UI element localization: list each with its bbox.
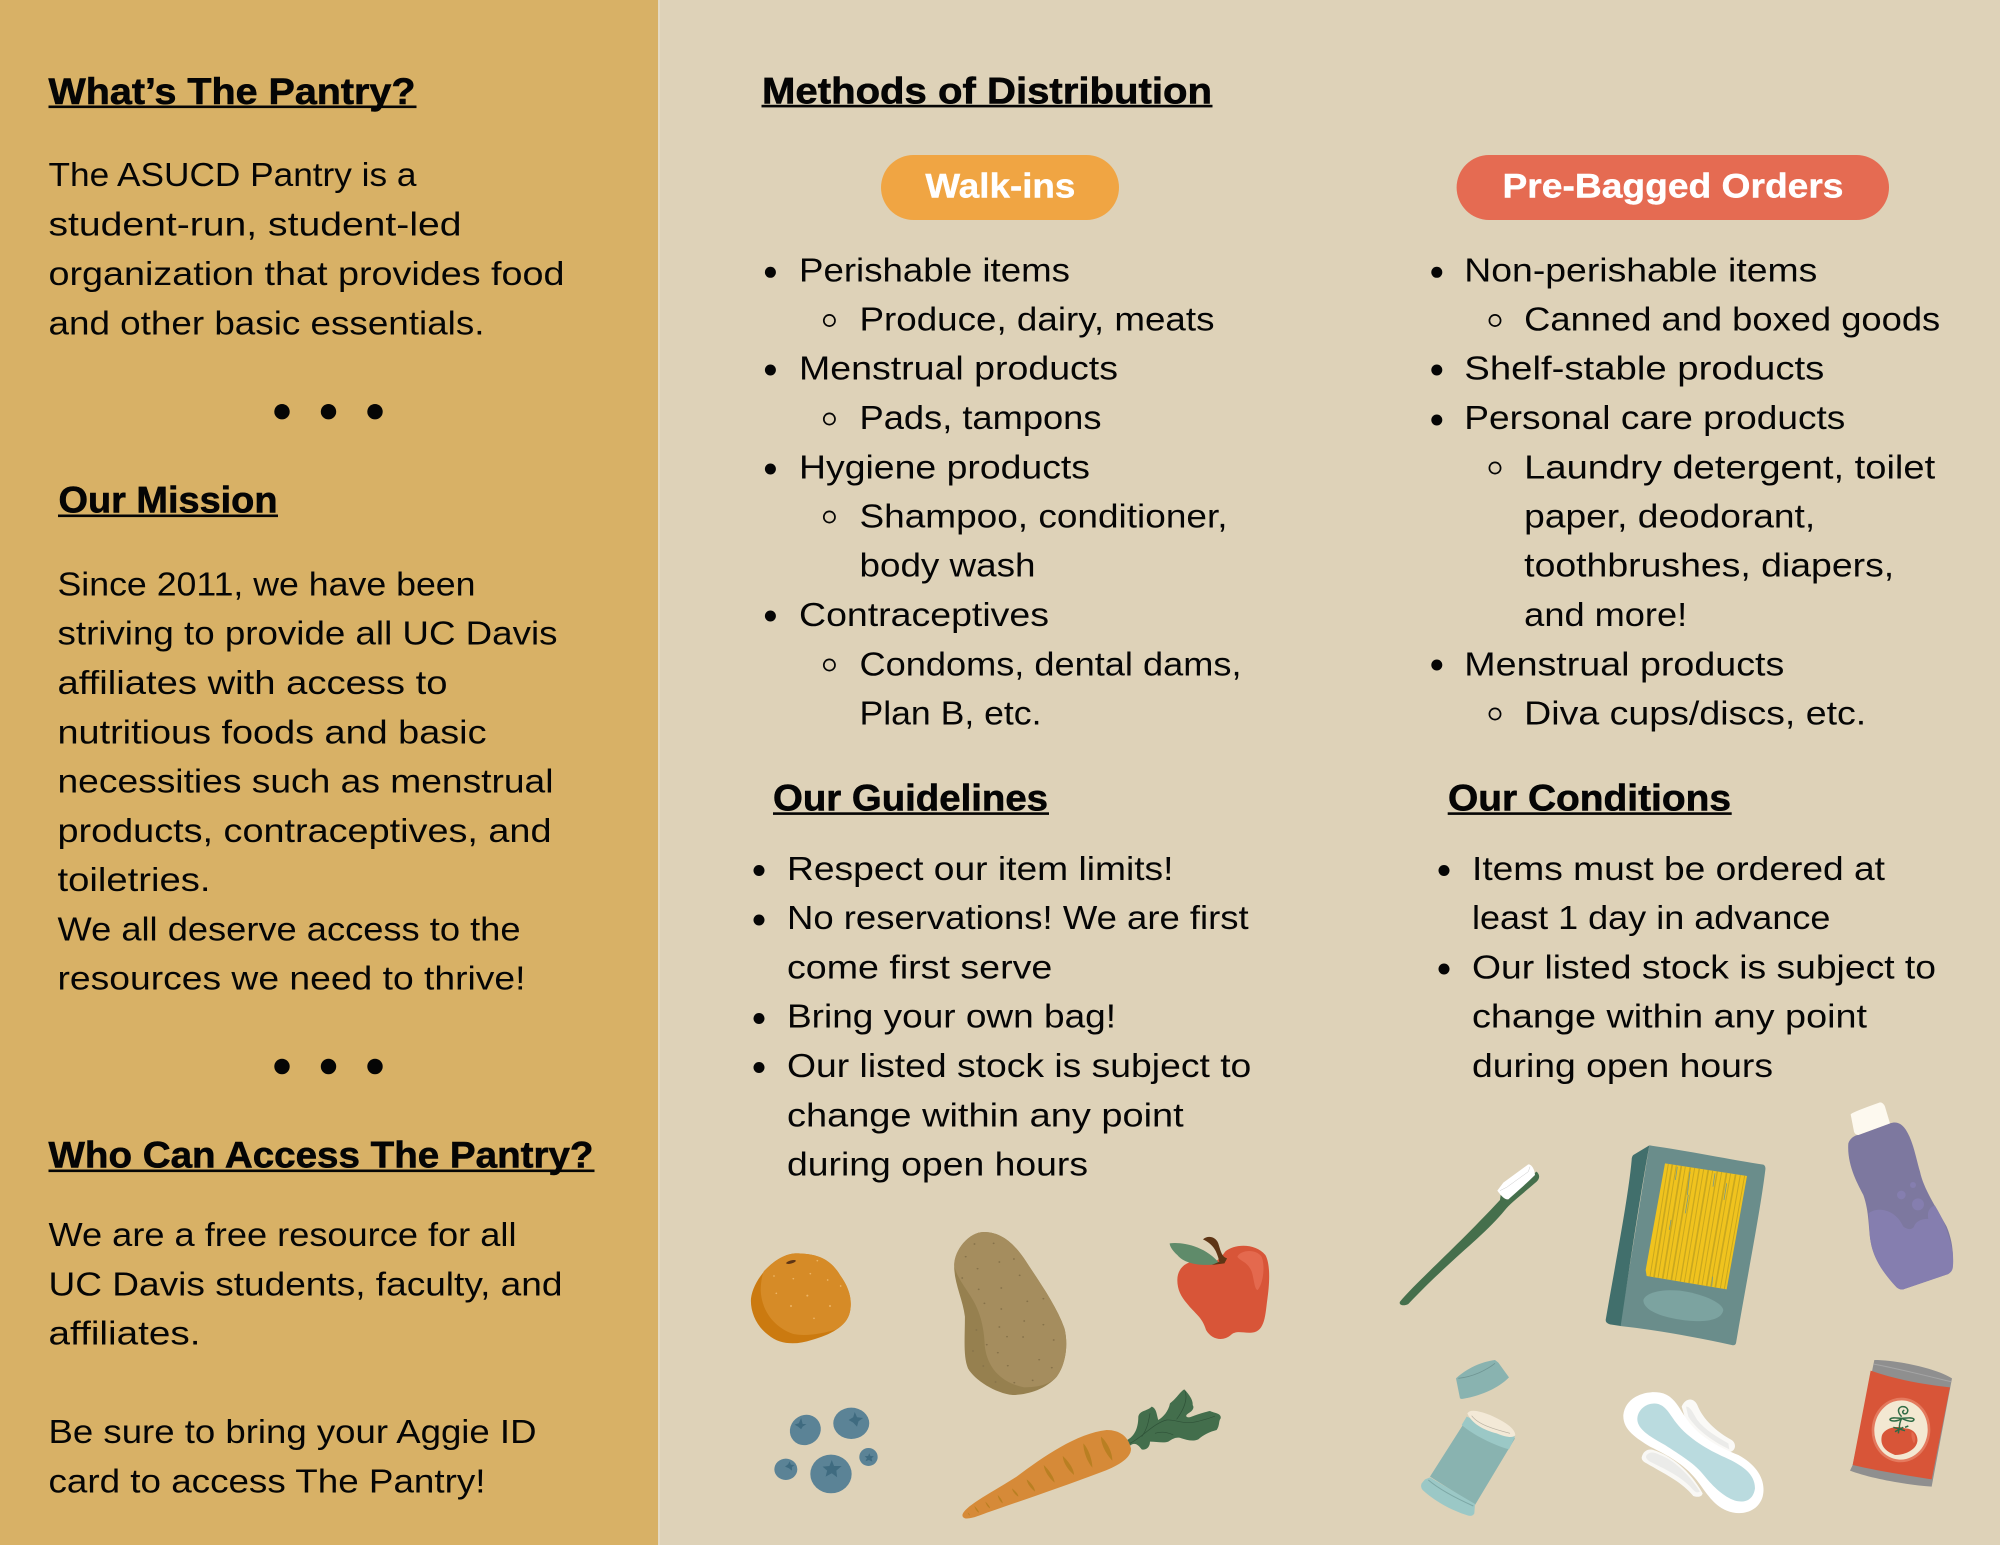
list: pre-bagged items: and more! xyxy=(1524,596,1687,633)
text block: mission: products, contraceptives, and xyxy=(58,812,552,849)
list: guidelines: change within any point xyxy=(787,1096,1184,1133)
text block: mission: toiletries. xyxy=(58,861,210,898)
icon: orange xyxy=(751,1253,851,1343)
list: guidelines xyxy=(754,850,1251,1183)
list: guidelines: come first serve xyxy=(787,948,1052,985)
list: walk-ins items: body wash xyxy=(860,546,1036,584)
list: conditions xyxy=(1438,850,1936,1084)
divider dots: first xyxy=(274,404,383,419)
list: walk-ins items: Shampoo, conditioner, xyxy=(860,498,1228,534)
text block: about the pantry: The ASUCD Pantry is a xyxy=(48,156,417,193)
icon: menstrual pad xyxy=(1623,1392,1764,1513)
text block: who can access: UC Davis students, faculty, and xyxy=(48,1265,562,1302)
text block: who can access: Be sure to bring your Aggie ID xyxy=(48,1413,536,1450)
icon: tomato can xyxy=(1850,1360,1952,1487)
list: pre-bagged items: paper, deodorant, xyxy=(1524,498,1815,534)
list: pre-bagged items: Non-perishable items xyxy=(1464,252,1817,289)
list: pre-bagged items: Canned and boxed goods xyxy=(1524,301,1940,338)
heading: What's The Pantry: What’s The Pantry? xyxy=(48,71,416,112)
text block: about the pantry xyxy=(48,156,564,342)
list: guidelines: Respect our item limits! xyxy=(787,850,1174,887)
list: walk-ins items: Perishable items xyxy=(799,252,1070,289)
text block: mission xyxy=(58,565,558,996)
text block: mission: nutritious foods and basic xyxy=(58,713,487,750)
heading: Our Mission: Our Mission xyxy=(58,480,278,521)
list: conditions: Our listed stock is subject to xyxy=(1472,948,1936,985)
text block: mission: striving to provide all UC Davis xyxy=(58,615,558,652)
list: guidelines: Bring your own bag! xyxy=(787,998,1116,1035)
icon: toothbrush xyxy=(1400,1164,1539,1305)
list: walk-ins items: Condoms, dental dams, xyxy=(860,646,1242,682)
icon: potato xyxy=(954,1232,1066,1395)
badge: Pre-Bagged Orders: Pre-Bagged Orders xyxy=(1502,167,1844,205)
heading: Our Conditions: Our Conditions xyxy=(1448,778,1731,819)
heading: Methods of Distribution: Methods of Distribution xyxy=(762,70,1212,111)
text block: who can access xyxy=(48,1216,562,1499)
list: pre-bagged items: toothbrushes, diapers, xyxy=(1524,546,1894,584)
text block: mission: Since 2011, we have been xyxy=(58,565,476,602)
badge: Pre-Bagged Orders xyxy=(1457,155,1889,220)
list: walk-ins items: Pads, tampons xyxy=(860,399,1102,436)
icon: shampoo bottle xyxy=(1848,1102,1953,1289)
list: pre-bagged items: Diva cups/discs, etc. xyxy=(1524,694,1866,732)
icon: deodorant xyxy=(1421,1360,1515,1516)
list: conditions: change within any point xyxy=(1472,998,1867,1035)
text block: mission: We all deserve access to the xyxy=(58,910,520,948)
list: guidelines: Our listed stock is subject to xyxy=(787,1047,1251,1084)
text block: who can access: card to access The Pantry! xyxy=(48,1462,486,1499)
text block: mission: affiliates with access to xyxy=(58,664,447,701)
list: conditions: during open hours xyxy=(1472,1047,1773,1084)
icon: apple xyxy=(1170,1237,1269,1339)
illustration group: food items xyxy=(751,1232,1269,1518)
list: pre-bagged items: Personal care products xyxy=(1464,399,1845,436)
list: walk-ins items: Menstrual products xyxy=(799,350,1118,386)
list: pre-bagged items xyxy=(1431,252,1940,732)
badge: Walk-ins xyxy=(881,155,1119,220)
divider dots: second xyxy=(274,1059,383,1074)
list: conditions: least 1 day in advance xyxy=(1472,899,1830,936)
icon: carrot xyxy=(962,1389,1221,1518)
text block: about the pantry: and other basic essentials. xyxy=(48,304,484,342)
icon: pasta box xyxy=(1606,1145,1765,1345)
list: walk-ins items: Hygiene products xyxy=(799,448,1090,486)
list: pre-bagged items: Laundry detergent, toilet xyxy=(1524,448,1935,486)
text block: who can access: affiliates. xyxy=(48,1315,200,1352)
list: pre-bagged items: Menstrual products xyxy=(1464,646,1784,682)
panel: left sidebar xyxy=(0,0,660,1545)
list: guidelines: during open hours xyxy=(787,1146,1088,1183)
list: pre-bagged items: Shelf-stable products xyxy=(1464,350,1824,386)
text block: mission: necessities such as menstrual xyxy=(58,763,554,800)
list: walk-ins items: Contraceptives xyxy=(799,596,1049,633)
icon: blueberries xyxy=(774,1408,878,1493)
text block: mission: resources we need to thrive! xyxy=(58,960,526,996)
text block: about the pantry: student-run, student-led xyxy=(48,206,461,242)
heading: Who Can Access The Pantry: Who Can Access The Pantry? xyxy=(48,1135,594,1176)
list: conditions: Items must be ordered at xyxy=(1472,850,1885,887)
text block: about the pantry: organization that provides food xyxy=(48,255,564,292)
list: guidelines: No reservations! We are first xyxy=(787,899,1249,936)
list: walk-ins items: Plan B, etc. xyxy=(860,694,1042,732)
illustration group: household items xyxy=(1400,1102,1953,1516)
list: walk-ins items xyxy=(765,252,1242,732)
text block: who can access: We are a free resource for all xyxy=(48,1216,516,1253)
badge: Walk-ins: Walk-ins xyxy=(925,167,1075,205)
heading: Our Guidelines: Our Guidelines xyxy=(773,778,1048,819)
list: walk-ins items: Produce, dairy, meats xyxy=(860,301,1214,338)
